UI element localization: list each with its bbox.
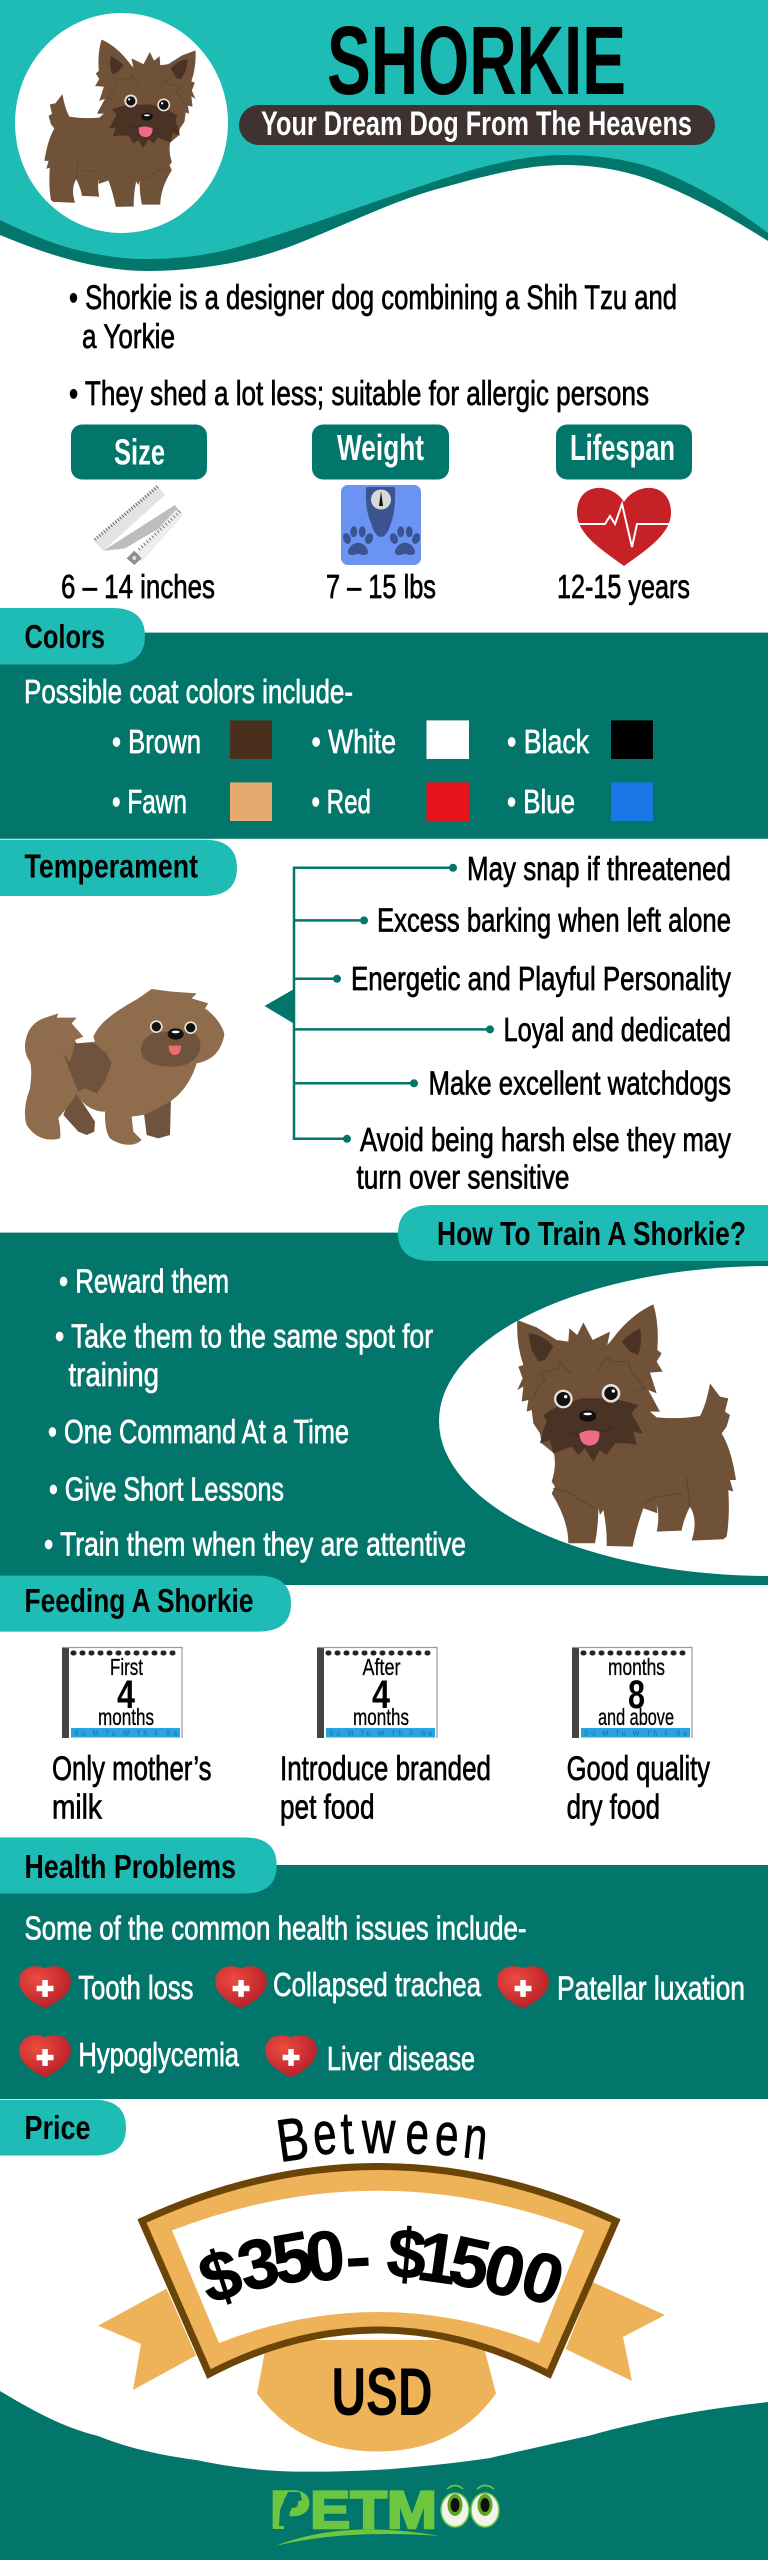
logo: petmoo: [270, 2481, 499, 2546]
icon: heart with pulse: [577, 488, 671, 566]
panel: price: [0, 2098, 665, 2452]
white circle behind dog: [15, 13, 228, 233]
color: fawn: [112, 782, 272, 821]
footer wave: [0, 2391, 768, 2560]
price amount: 0: [476, 2228, 534, 2314]
price amount: $: [190, 2233, 251, 2319]
training tips: • Train them when they are attentive: [44, 1525, 466, 1562]
title: SHORKIE: [327, 6, 626, 115]
arched word: Between: [273, 2098, 491, 2175]
stat: size: [61, 424, 215, 605]
arched word: Between: B: [273, 2105, 313, 2175]
color: brown: • Brown: [112, 723, 201, 760]
issue: tooth loss: [19, 1966, 193, 2008]
arched word: Between: t: [339, 2101, 355, 2168]
calendar: first 4 months: [62, 1647, 183, 1738]
caption: introduce branded pet food: pet food: [280, 1788, 374, 1826]
arched word: Between: w: [361, 2100, 396, 2166]
panel: feeding: [0, 1576, 710, 1826]
issue: hypoglycemia: [19, 2035, 240, 2078]
color: black: [507, 720, 653, 760]
price amount: -: [343, 2221, 373, 2293]
white ellipse behind dog: [439, 1266, 768, 1576]
price amount: 3: [230, 2221, 287, 2307]
issue: collapsed trachea: [215, 1966, 482, 2008]
price amount: 0: [302, 2215, 349, 2297]
stat: lifespan: 12-15 years: [557, 568, 690, 605]
issue: liver disease: [265, 2035, 475, 2078]
price amount: $: [384, 2213, 430, 2295]
issue: tooth loss: Tooth loss: [78, 1969, 193, 2006]
training tips: • Reward them: [59, 1262, 229, 1299]
issue: hypoglycemia: Hypoglycemia: [78, 2036, 240, 2073]
icon: shorkie dog: [517, 1304, 736, 1547]
header panel: [0, 0, 768, 271]
calendar: 8 months and above: months: [608, 1654, 665, 1680]
stat: lifespan: Lifespan: [570, 427, 675, 468]
color: blue: • Blue: [507, 783, 575, 820]
stat: weight: 7 – 15 lbs: [326, 568, 436, 605]
heading tab: training: [398, 1205, 768, 1261]
caption: introduce branded pet food: Introduce branded: [280, 1750, 491, 1788]
price amount: [190, 2213, 573, 2321]
trait list: turn over sensitive: [356, 1159, 570, 1196]
currency label: USD: [332, 2354, 432, 2430]
arched word: Between: e: [433, 2100, 461, 2168]
training tips: • Take them to the same spot for: [55, 1318, 433, 1354]
icon: shorkie dog: [44, 40, 196, 207]
logo: petmoo: PETM: [270, 2481, 437, 2540]
white plate: [172, 2191, 584, 2343]
panel: training: [0, 1205, 768, 1585]
caption: introduce branded pet food: [280, 1750, 491, 1826]
header wave: dark edge: [0, 150, 768, 271]
arched word: Between: e: [309, 2098, 340, 2168]
trait list: [351, 850, 731, 1196]
arched word: Between: n: [461, 2103, 491, 2172]
color: white: [312, 720, 469, 760]
icon: paw scale: [341, 485, 422, 565]
heading tab: price: [0, 2100, 126, 2156]
calendar: 8 months and above: [572, 1647, 693, 1738]
issue: liver disease: Liver disease: [327, 2040, 475, 2077]
intro text block: [69, 279, 677, 413]
calendar: first 4 months: Su M Tu W Th F Sa: [74, 1730, 177, 1738]
issue: patellar luxation: [497, 1966, 745, 2008]
price amount: 5: [266, 2216, 318, 2300]
stat: weight: Weight: [337, 427, 424, 468]
heading tab: colors: [0, 608, 145, 664]
header wave: teal fill: [0, 0, 768, 259]
caption: good quality dry food: Good quality: [567, 1750, 710, 1788]
color: blue: [507, 782, 653, 821]
price amount: 5: [443, 2221, 497, 2305]
calendar: 8 months and above: 8: [628, 1673, 645, 1717]
intro text: Possible coat colors include-: [24, 673, 353, 710]
training tips: • Give Short Lessons: [49, 1471, 284, 1508]
intro text: Some of the common health issues include-: [24, 1910, 526, 1946]
calendar: after 4 months: After: [362, 1654, 401, 1680]
panel: colors: [0, 608, 768, 839]
calendar: 8 months and above: Su M Tu W Th F Sa: [584, 1730, 687, 1738]
heading tab: health: Health Problems: [24, 1848, 236, 1885]
calendar: first 4 months: 4: [117, 1673, 136, 1717]
lower gold disc: [257, 2340, 496, 2452]
training tips: training: [68, 1356, 159, 1393]
heading tab: temperament: Temperament: [24, 848, 198, 885]
color: red: [312, 782, 469, 821]
caption: good quality dry food: [567, 1750, 710, 1826]
calendar: after 4 months: 4: [372, 1673, 391, 1717]
color: white: • White: [312, 723, 396, 760]
badge frame: [142, 2166, 616, 2374]
heading tab: price: Price: [24, 2109, 90, 2146]
panel: health problems: [0, 1837, 768, 2099]
calendar: 8 months and above: and above: [598, 1704, 674, 1730]
caption: only mother's milk: milk: [52, 1788, 103, 1826]
intro text block: a Yorkie: [82, 318, 175, 356]
color: brown: [112, 720, 272, 760]
icon: measuring tape: [93, 485, 183, 565]
price amount: 0: [512, 2235, 573, 2321]
color: fawn: • Fawn: [112, 783, 187, 820]
stat: weight: [312, 424, 449, 605]
icon: fluffy dog: [25, 989, 224, 1145]
ribbon tails: [98, 2289, 196, 2390]
panel: temperament: [0, 840, 731, 1196]
heading tab: temperament: [0, 840, 237, 896]
caption: only mother's milk: [52, 1750, 212, 1826]
heading tab: health: [0, 1837, 277, 1894]
calendar: after 4 months: months: [353, 1704, 409, 1730]
stat: lifespan: [556, 424, 692, 605]
ribbon badge: [98, 2166, 665, 2452]
calendar: after 4 months: Su M Tu W Th F Sa: [329, 1730, 432, 1738]
training tips: • One Command At a Time: [48, 1413, 349, 1450]
heading tab: colors: Colors: [24, 618, 105, 655]
stat: size: 6 – 14 inches: [61, 568, 215, 605]
heading tab: feeding: Feeding A Shorkie: [24, 1582, 254, 1619]
connector tree: [264, 864, 494, 1143]
arched word: Between: e: [405, 2099, 430, 2167]
training tips: [44, 1262, 466, 1562]
heading tab: feeding: [0, 1576, 291, 1632]
caption: only mother's milk: Only mother’s: [52, 1750, 212, 1788]
color: red: • Red: [312, 783, 371, 820]
issue: collapsed trachea: Collapsed trachea: [273, 1966, 482, 2003]
calendar: after 4 months: [317, 1647, 438, 1738]
caption: good quality dry food: dry food: [567, 1788, 660, 1826]
calendar: first 4 months: First: [110, 1654, 143, 1680]
stat: size: Size: [114, 432, 165, 472]
color: black: • Black: [507, 723, 589, 760]
price amount: 1: [413, 2217, 463, 2299]
calendar: first 4 months: months: [98, 1704, 154, 1730]
